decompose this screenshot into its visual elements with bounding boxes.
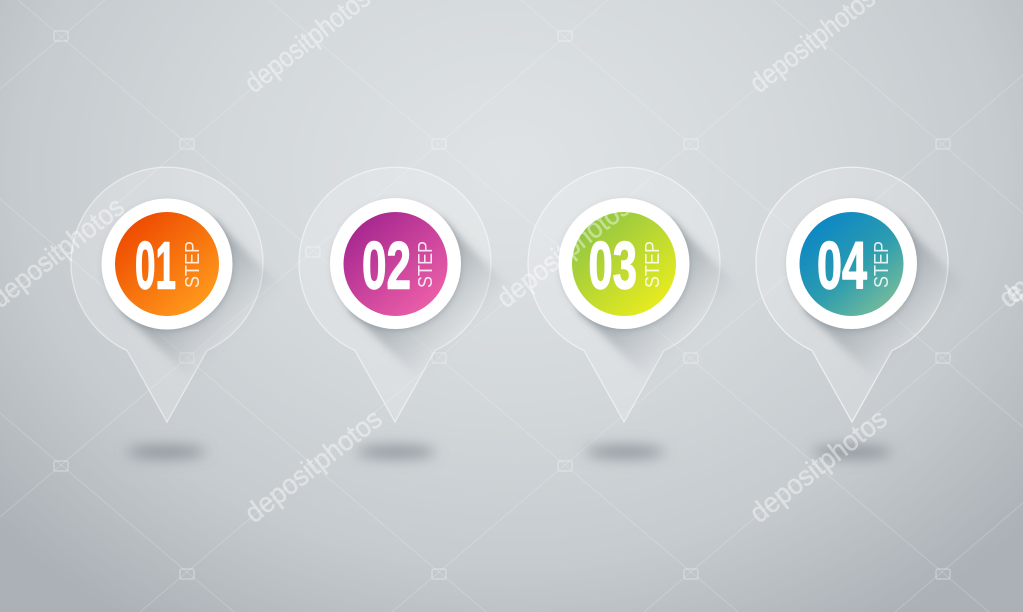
long shadow 1 [121, 218, 283, 380]
magenta badge [344, 212, 448, 316]
watermark text: depositphotos [491, 191, 636, 314]
white ring 2 [330, 198, 461, 329]
long shadow 4 [805, 218, 967, 380]
label STEP: STEP [414, 241, 437, 288]
pin 4 ground shadow [812, 446, 892, 458]
watermark text: depositphotos [744, 403, 893, 529]
white ring 1 [102, 198, 232, 330]
glass pin 2 [299, 167, 491, 422]
pin 3: step 03 [528, 167, 740, 422]
label STEP: STEP [641, 241, 664, 288]
number 04: 04 [817, 228, 867, 304]
white ring 4 [786, 198, 917, 329]
watermark cameras [54, 31, 950, 579]
pin 1 ground shadow [126, 446, 206, 458]
pin 2 ground shadow [356, 446, 436, 458]
number 02: 02 [362, 228, 411, 304]
pin 4: step 04 [756, 167, 967, 422]
green badge [572, 212, 676, 316]
orange badge [115, 212, 219, 316]
glass pin 1 [71, 167, 263, 422]
pin 1: step 01 [71, 167, 283, 422]
long shadow 2 [349, 218, 511, 380]
label STEP: STEP [181, 241, 204, 288]
pin 2: step 02 [299, 167, 511, 422]
watermark text: depositphotos [239, 403, 388, 529]
glass pin 3 [528, 167, 720, 422]
label STEP: STEP [870, 241, 893, 288]
glass pin 4 [756, 167, 948, 422]
white ring 3 [558, 198, 690, 329]
number 01: 01 [135, 228, 176, 304]
long shadow 3 [578, 218, 740, 380]
pin 3 ground shadow [585, 446, 665, 458]
number 03: 03 [588, 228, 637, 304]
blue badge [800, 212, 904, 316]
